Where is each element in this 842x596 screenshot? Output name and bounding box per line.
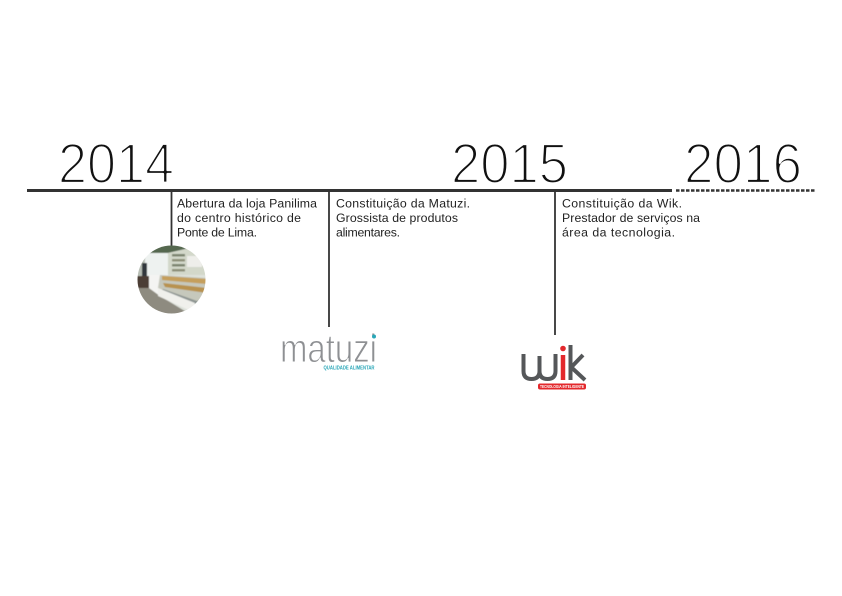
- logo: matuzi: matuzi: [280, 327, 377, 371]
- text block: Panilima: Ponte de Lima.: [177, 226, 257, 240]
- heading: year 2016: 2016: [684, 132, 802, 196]
- connector: Panilima: [170, 191, 172, 247]
- text block: Wik: Prestador de serviços na: [562, 211, 700, 225]
- text block: Matuzi: Constituição da Matuzi.: [336, 196, 470, 210]
- text block: Panilima: do centro histórico de: [177, 211, 301, 225]
- text block: Matuzi: Grossista de produtos: [336, 211, 458, 225]
- heading: year 2015: 2015: [451, 132, 568, 196]
- heading: year 2014: 2014: [58, 132, 174, 196]
- text block: Wik: Constituição da Wik.: [562, 196, 682, 210]
- logo tagline: wik: TECNOLOGIA INTELIGENTE: [540, 384, 584, 389]
- connector: Matuzi: [328, 191, 330, 327]
- logo tagline: matuzi: QUALIDADE ALIMENTAR: [324, 366, 375, 372]
- logo letter: k: [570, 345, 585, 380]
- logo accent: matuzi teal dot: [372, 334, 376, 338]
- logo tagline bar: wik: [538, 384, 586, 390]
- logo letter: w: [524, 354, 556, 379]
- text block: Matuzi: [336, 196, 470, 240]
- logo letter: i dot: [560, 346, 566, 351]
- text block: Wik: [562, 196, 700, 240]
- text block: Wik: área da tecnologia.: [562, 226, 675, 240]
- photo: Panilima shop interior: [136, 244, 207, 316]
- timeline axis: solid section: [27, 189, 672, 192]
- text block: Panilima: Abertura da loja Panilima: [177, 196, 317, 210]
- text block: Panilima: [177, 196, 317, 240]
- timeline axis: dashed section to 2016: [676, 189, 815, 192]
- logo letter: i stem: [561, 355, 565, 380]
- logo: wik: [524, 345, 586, 390]
- text block: Matuzi: alimentares.: [336, 226, 400, 240]
- connector: Wik: [554, 191, 556, 335]
